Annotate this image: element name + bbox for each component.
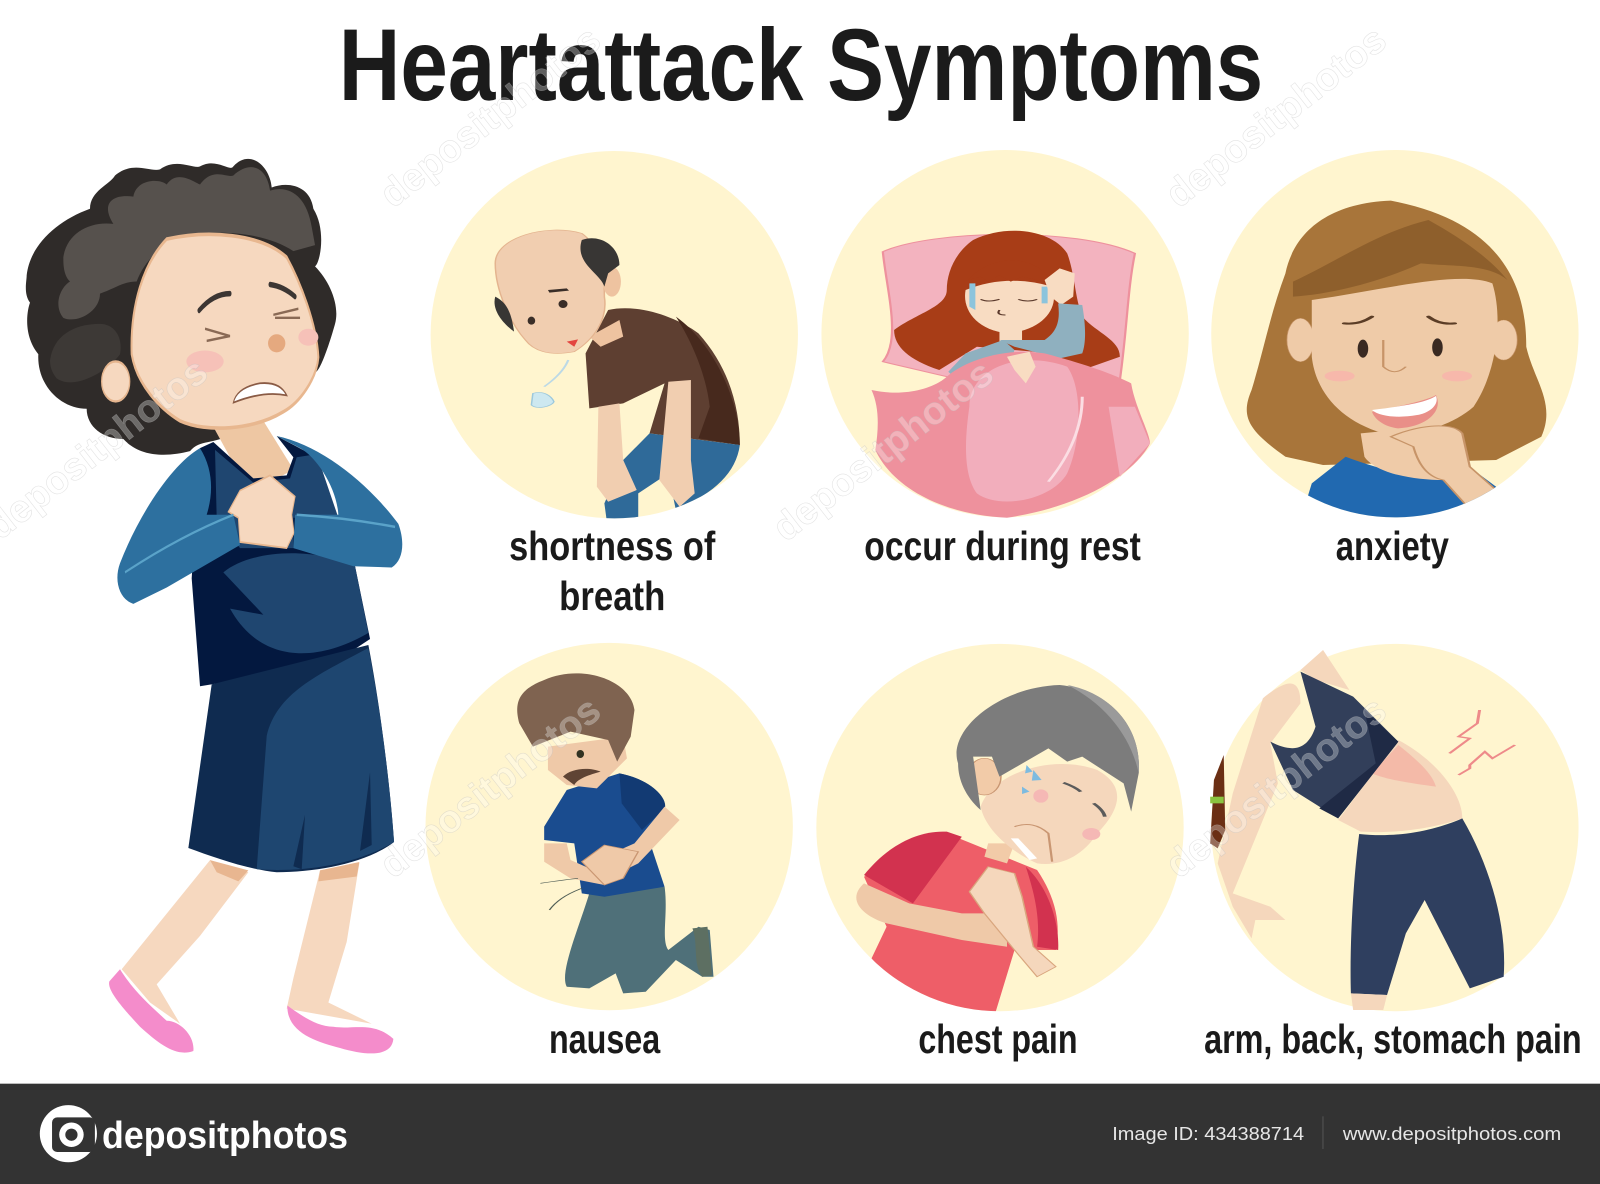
legs [122, 860, 372, 1024]
circle background [1211, 150, 1579, 517]
panel: nausea [426, 643, 793, 1062]
woman resting in bed [872, 231, 1150, 518]
watermark: depositphotos [765, 352, 1002, 550]
divider [1322, 1116, 1323, 1149]
face [132, 234, 318, 428]
anxious woman portrait [1247, 201, 1546, 520]
label: nausea [549, 1016, 660, 1062]
hair [26, 159, 336, 455]
man out of breath [495, 230, 740, 520]
icon: depositphotos camera logo [40, 1105, 97, 1162]
website: www.depositphotos.com [1342, 1123, 1561, 1144]
ear [102, 361, 130, 401]
label: chest pain [918, 1016, 1078, 1062]
kneeling man holding stomach [517, 673, 713, 993]
main figure: woman clutching her chest [26, 159, 402, 1053]
skirt [188, 645, 394, 872]
watermark: depositphotos [372, 18, 609, 216]
circle background [816, 644, 1184, 1011]
dress top [192, 436, 370, 686]
watermark: depositphotos [1158, 688, 1395, 887]
label: shortness of [509, 523, 716, 569]
logo wordmark: depositphotos [102, 1114, 348, 1156]
watermark: depositphotos [1158, 18, 1395, 216]
footer background [0, 1084, 1600, 1184]
woman bending with back pain [1210, 650, 1515, 1010]
label: anxiety [1336, 523, 1449, 569]
panel: shortness of breath [431, 151, 798, 619]
watermarks [0, 18, 1395, 887]
panel: anxiety [1211, 150, 1579, 569]
circle background [431, 151, 798, 518]
older man holding chest [856, 685, 1139, 1012]
hands [228, 475, 295, 548]
title: Heartattack Symptoms [339, 8, 1263, 122]
image id: Image ID: 434388714 [1112, 1123, 1304, 1144]
label: occur during rest [864, 523, 1141, 569]
panel: chest pain [816, 644, 1184, 1062]
sleeves [117, 436, 402, 604]
circle background [821, 150, 1189, 517]
watermark: depositphotos [372, 688, 609, 887]
shoes [109, 969, 393, 1053]
circle background [426, 643, 793, 1010]
label line 2: breath [559, 573, 665, 619]
neck [213, 421, 293, 484]
panel: occur during rest [821, 150, 1189, 569]
panel: arm, back, stomach pain [1204, 644, 1582, 1062]
circle background [1211, 644, 1579, 1011]
footer bar [0, 1084, 1600, 1184]
